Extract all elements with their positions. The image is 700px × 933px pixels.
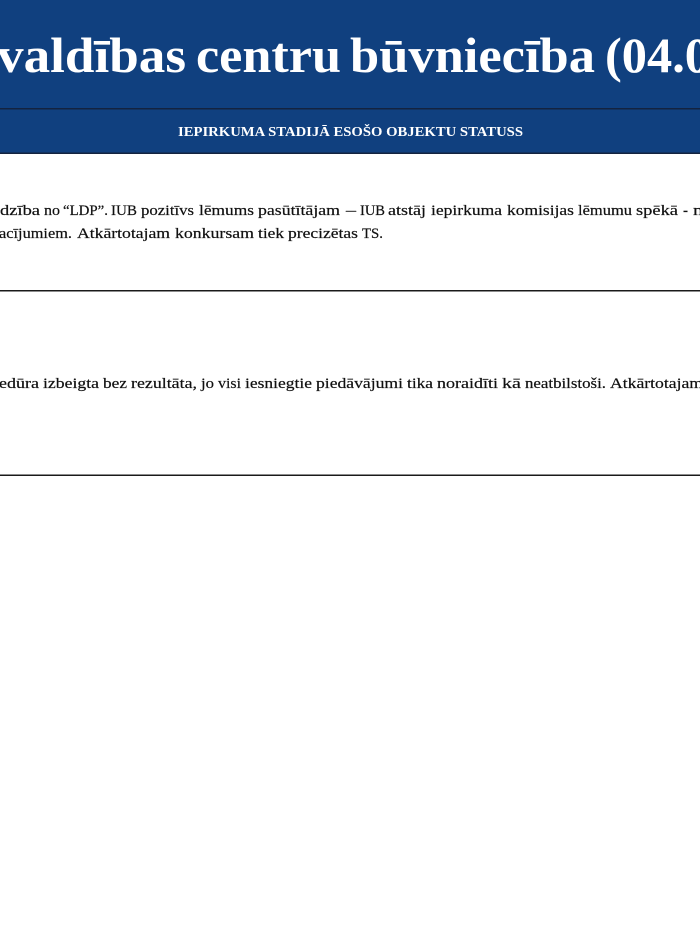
title: būvniecība bbox=[350, 27, 595, 83]
table row 1 text: IUB bbox=[111, 203, 137, 219]
table row 1 text: pozitīvs bbox=[141, 203, 194, 219]
table row 2 text: bez bbox=[103, 376, 127, 392]
title banner bbox=[0, 0, 700, 108]
table row 1 text: – bbox=[345, 203, 357, 219]
table row 1 text: tiek bbox=[258, 226, 285, 242]
subheading bar bbox=[0, 110, 700, 152]
table row 1 text: spēkā bbox=[636, 203, 678, 219]
table row 2 text: visi bbox=[218, 376, 241, 392]
table row 2 text: rezultāta, bbox=[131, 376, 197, 392]
table row 2 text: izbeigta bbox=[43, 376, 99, 392]
title: valdības bbox=[0, 27, 186, 83]
table row 2 text: piedāvājumi bbox=[316, 376, 403, 392]
table row 1 text: acījumiem. bbox=[0, 226, 72, 242]
table row 1 text: “LDP”. bbox=[63, 203, 108, 219]
table row 2 text: kā bbox=[502, 376, 521, 392]
table row 1 text: - bbox=[683, 203, 688, 219]
table row 2 text: noraidīti bbox=[437, 376, 498, 392]
table row 2 text bbox=[0, 376, 700, 392]
title: centru bbox=[196, 27, 341, 83]
table row 1 text bbox=[0, 203, 700, 242]
table row 1 text: pasūtītājam bbox=[258, 203, 340, 219]
table row 2 text: iesniegtie bbox=[245, 376, 312, 392]
table row 2 text: neatbilstoši. bbox=[525, 376, 606, 392]
table row 1 text: konkursam bbox=[175, 226, 254, 242]
table row 1 text: Atkārtotajam bbox=[77, 226, 170, 242]
table row 1 text: lēmumu bbox=[578, 203, 633, 219]
table row 1 text: atstāj bbox=[388, 203, 426, 219]
table row 1 text: dzība bbox=[0, 203, 40, 219]
table row 1 text: TS. bbox=[362, 226, 383, 242]
table row 1 text: iepirkuma bbox=[431, 203, 502, 219]
table row 1 text: IUB bbox=[360, 203, 385, 219]
table row 2 text: tika bbox=[407, 376, 433, 392]
table row 2 text: jo bbox=[200, 376, 214, 392]
table row 1 text: no bbox=[44, 203, 60, 219]
table row 1 text: komisijas bbox=[507, 203, 574, 219]
subheading: IEPIRKUMA STADIJĀ ESOŠO OBJEKTU STATUSS bbox=[178, 123, 523, 140]
table row 2 text: Atkārtotajam bbox=[610, 376, 700, 392]
title bbox=[0, 27, 700, 83]
table row 1 text: lēmums bbox=[199, 203, 254, 219]
table row 1 text: precizētas bbox=[288, 226, 358, 242]
